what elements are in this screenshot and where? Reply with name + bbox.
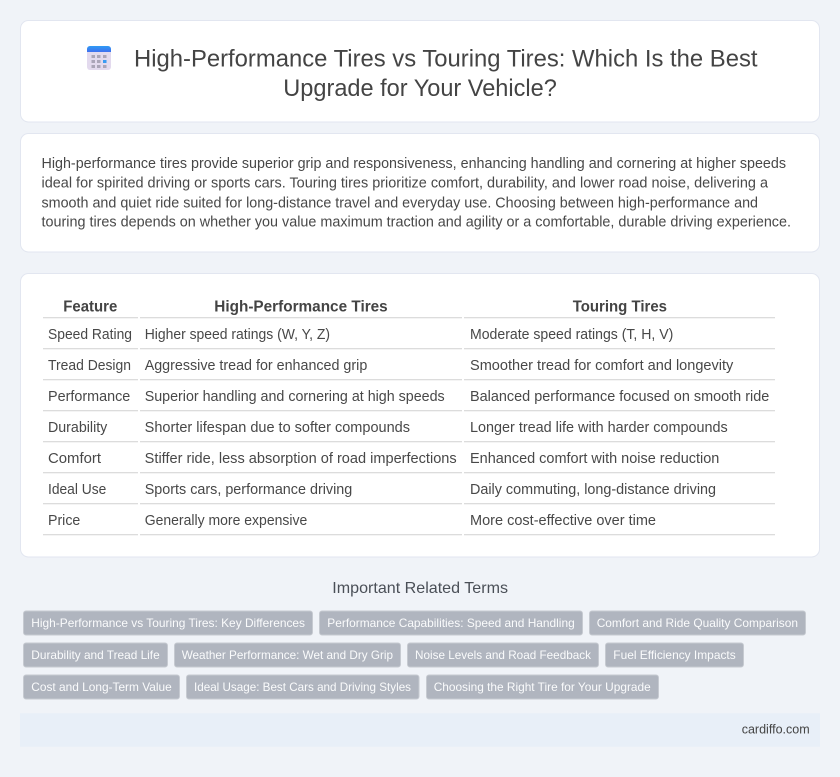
tag: choosing the right tire (426, 675, 658, 699)
tag: noise levels (408, 643, 598, 667)
tag: performance capabilities: Performance Capabilities: Speed and Handling (327, 616, 575, 630)
summary text (42, 156, 791, 231)
row: comfort: Comfort (48, 451, 101, 467)
tag: performance capabilities (320, 611, 582, 635)
title: High-Performance Tires vs Touring Tires: Which Is the Best (134, 46, 758, 73)
related term tags (24, 611, 806, 699)
row: tread design (48, 358, 734, 374)
summary text: High-performance tires provide superior grip and responsiveness, enhancing handling and cornering at higher speeds (42, 156, 786, 172)
footer bar (20, 713, 820, 747)
row: tread design: Tread Design (48, 358, 131, 374)
row: comfort: Enhanced comfort with noise reduction (470, 451, 719, 467)
tag: weather performance: Weather Performance: Wet and Dry Grip (182, 648, 393, 662)
table header: Feature (63, 299, 117, 316)
row: performance: Superior handling and cornering at high speeds (145, 389, 445, 405)
tag: key differences (24, 611, 312, 635)
tag: ideal usage (186, 675, 419, 699)
row: comfort (48, 451, 719, 467)
summary text: smooth and quiet ride suited for long-distance travel and everyday use. Choosing between high-performance and (42, 196, 758, 212)
table header: Touring Tires (573, 299, 667, 316)
row: price (48, 513, 656, 529)
row: performance: Performance (48, 389, 130, 405)
tag: comfort comparison (590, 611, 806, 635)
tag: noise levels: Noise Levels and Road Feedback (415, 648, 592, 662)
tag: ideal usage: Ideal Usage: Best Cars and Driving Styles (194, 680, 411, 694)
tag: fuel efficiency: Fuel Efficiency Impacts (613, 648, 736, 662)
tag: key differences: High-Performance vs Touring Tires: Key Differences (31, 616, 305, 630)
tag: comfort comparison: Comfort and Ride Quality Comparison (597, 616, 798, 630)
header panel (20, 20, 820, 122)
row: performance: Balanced performance focused on smooth ride (470, 389, 769, 405)
panel: summary paragraph (20, 134, 820, 252)
row: comfort: Stiffer ride, less absorption of road imperfections (145, 451, 457, 467)
tag: durability (24, 643, 168, 667)
tag: cost and value: Cost and Long-Term Value (31, 680, 172, 694)
row: durability: Shorter lifespan due to softer compounds (145, 420, 410, 436)
row: performance (48, 389, 769, 405)
row: tread design: Smoother tread for comfort and longevity (470, 358, 734, 374)
row: price: More cost-effective over time (470, 513, 656, 529)
row: tread design: Aggressive tread for enhanced grip (145, 358, 367, 374)
table header (63, 299, 667, 316)
tag: durability: Durability and Tread Life (31, 648, 160, 662)
row: durability: Durability (48, 420, 108, 436)
icon: calendar (87, 46, 111, 70)
row: speed rating: Higher speed ratings (W, Y, Z) (145, 327, 330, 343)
row: durability: Longer tread life with harder compounds (470, 420, 728, 436)
panel: comparison table (20, 274, 820, 557)
footer source text: cardiffo.com (742, 723, 810, 737)
row: price: Generally more expensive (145, 513, 307, 529)
row: speed rating: Moderate speed ratings (T, H, V) (470, 327, 673, 343)
row: speed rating: Speed Rating (48, 327, 132, 343)
row: speed rating (48, 327, 673, 343)
title (134, 46, 758, 102)
row: price: Price (48, 513, 80, 529)
summary text: touring tires depends on whether you value maximum traction and agility or a comfortable, durable driving experience. (42, 215, 791, 231)
tag: fuel efficiency (606, 643, 744, 667)
table header: High-Performance Tires (214, 299, 388, 316)
heading: important related terms: Important Related Terms (332, 580, 508, 597)
tag: cost and value (24, 675, 180, 699)
row: ideal use: Ideal Use (48, 482, 106, 498)
row: ideal use: Daily commuting, long-distance driving (470, 482, 716, 498)
summary text: ideal for spirited driving or sports cars. Touring tires prioritize comfort, durability, and lower road noise, delivering a (42, 176, 768, 192)
row: durability (48, 420, 728, 436)
tag: weather performance (174, 643, 400, 667)
title: Upgrade for Your Vehicle? (283, 75, 557, 102)
row: ideal use (48, 482, 716, 498)
row: ideal use: Sports cars, performance driving (145, 482, 352, 498)
tag: choosing the right tire: Choosing the Right Tire for Your Upgrade (434, 680, 651, 694)
